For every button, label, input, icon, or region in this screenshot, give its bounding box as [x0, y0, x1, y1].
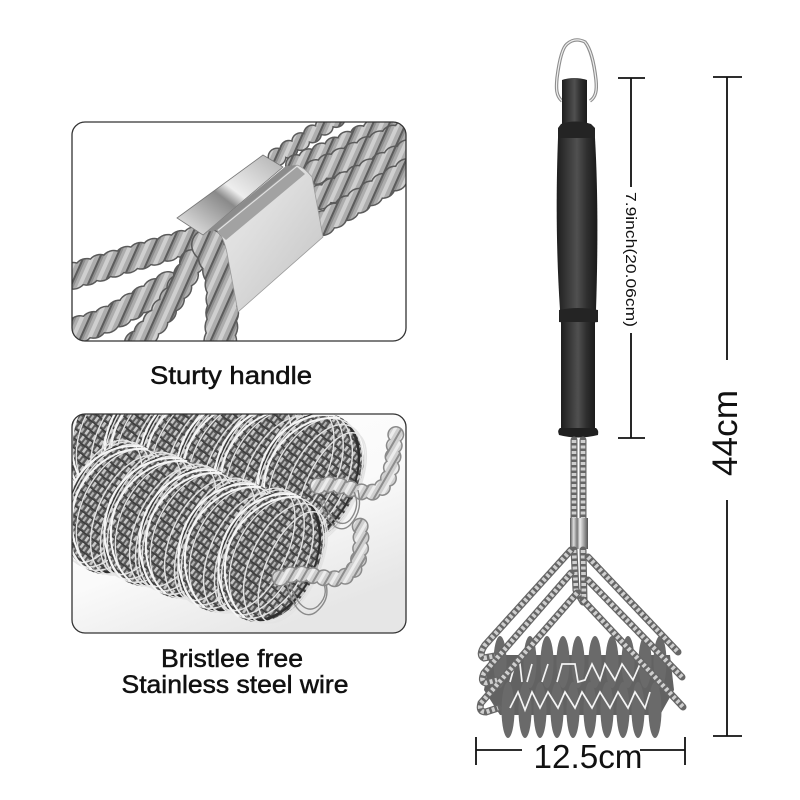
twisted shaft — [574, 440, 583, 520]
ferrule — [570, 518, 588, 549]
brush product illustration — [480, 40, 683, 738]
lower bristle coils — [484, 636, 674, 738]
dimension: width 12.5cm — [476, 737, 685, 775]
caption: bristle free stainless steel wire: Stainless steel wire — [122, 671, 348, 699]
caption: bristle free stainless steel wire — [122, 645, 348, 699]
white wire highlights — [510, 664, 650, 710]
panel: sturdy handle close-up — [66, 118, 412, 345]
twisted wires: upper right — [277, 118, 412, 223]
splayed twisted wires — [480, 550, 683, 712]
twisted wires: lower left — [66, 240, 222, 345]
front wire spine — [280, 525, 361, 579]
black handle — [557, 78, 598, 438]
dimension: total length 44cm: 44cm — [706, 390, 745, 476]
dimension: handle length 7.9 inch — [618, 78, 645, 438]
panel: stainless steel wire coils close-up — [71, 413, 407, 634]
metal clamp — [177, 155, 323, 312]
rear wire spine — [318, 425, 398, 493]
dimension: handle length 7.9 inch: 7.9inch(20.06cm) — [622, 192, 639, 327]
hanging loop — [557, 40, 596, 101]
back row of coils — [72, 414, 367, 540]
caption: sturdy handle: Sturty handle — [150, 362, 312, 390]
caption: bristle free stainless steel wire: Bristlee free — [161, 645, 303, 673]
dimension: width 12.5cm: 12.5cm — [534, 738, 642, 775]
dimension: total length 44cm — [706, 77, 745, 736]
trailing coil loops — [286, 490, 360, 615]
front row of coils — [72, 439, 328, 622]
